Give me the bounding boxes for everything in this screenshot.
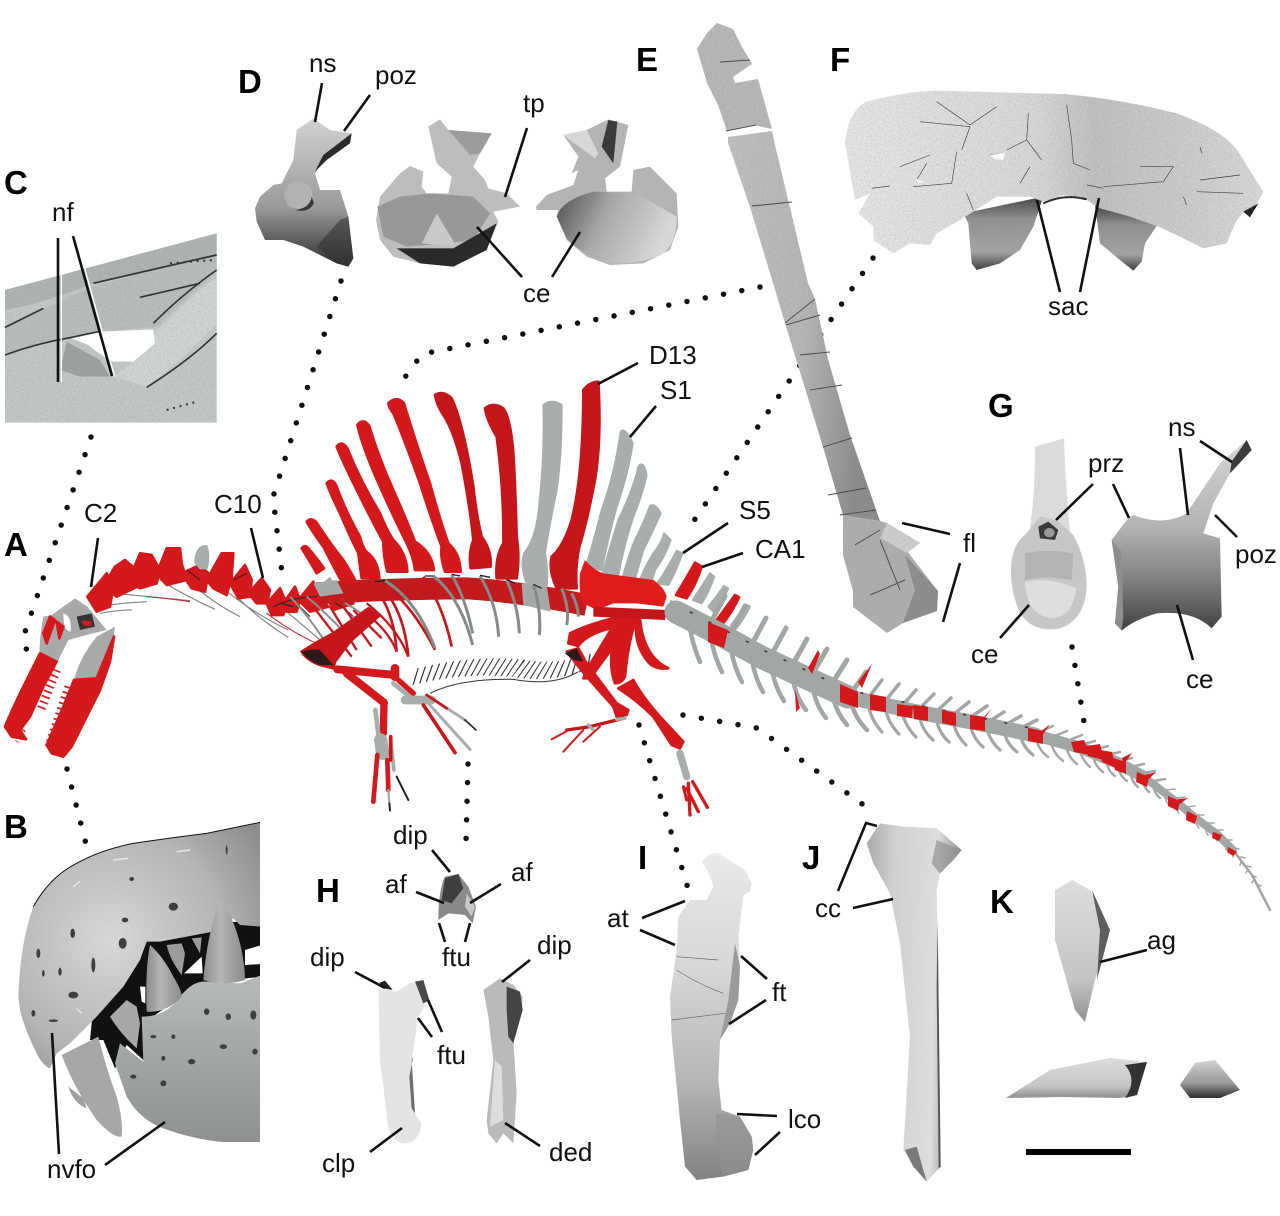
panel H bbox=[378, 874, 523, 1143]
label at: at bbox=[607, 903, 629, 933]
panel A: skeleton bbox=[5, 382, 1270, 910]
dotted connector: panel F to sacrum bbox=[691, 258, 873, 525]
label nvfo bbox=[47, 1033, 165, 1184]
phalanx lateral bbox=[483, 978, 523, 1143]
gray neural spine D12 bbox=[522, 402, 562, 587]
cervical vertebrae bbox=[87, 548, 353, 615]
panel letter H: H bbox=[316, 872, 340, 909]
dotted connector: panel J to hind limb bbox=[683, 715, 865, 806]
label dip: dip bbox=[393, 820, 428, 850]
panel letter K: K bbox=[990, 883, 1014, 920]
panel G bbox=[1011, 438, 1252, 631]
upper snout bbox=[18, 822, 262, 1068]
pelvis and hind limb bbox=[567, 617, 683, 748]
label dip bbox=[393, 820, 450, 872]
label ftu: ftu bbox=[437, 1040, 466, 1070]
neural spine gray bbox=[195, 546, 208, 568]
label CA1 bbox=[702, 534, 806, 567]
label tp: tp bbox=[523, 88, 545, 118]
label ce bbox=[477, 227, 580, 308]
panel letter A: A bbox=[4, 526, 28, 563]
label fl bbox=[902, 523, 976, 622]
ribs bbox=[368, 577, 452, 657]
lower teeth bbox=[203, 910, 245, 983]
label S5: S5 bbox=[739, 495, 771, 525]
claw end bbox=[1180, 1060, 1240, 1098]
panel letter E: E bbox=[636, 41, 658, 78]
red caudal spines bbox=[676, 563, 739, 625]
panel J bbox=[867, 823, 962, 1182]
label ftu bbox=[418, 1000, 466, 1070]
label nf bbox=[52, 197, 112, 382]
panel letter I: I bbox=[638, 839, 647, 876]
dotted connector: panel B to snout bbox=[67, 769, 86, 844]
dark jaw gap bbox=[90, 920, 262, 1068]
label ce bbox=[1177, 605, 1213, 694]
label ce bbox=[971, 605, 1029, 669]
neural spine base bbox=[843, 515, 938, 633]
label fl: fl bbox=[963, 528, 976, 558]
vertebra anterior concave bbox=[536, 119, 678, 265]
label poz: poz bbox=[1235, 539, 1277, 569]
label cc: cc bbox=[815, 893, 841, 923]
scale bar bbox=[1026, 1149, 1131, 1155]
label CA1: CA1 bbox=[755, 534, 806, 564]
panel F bbox=[845, 91, 1263, 271]
gray sacral spines bbox=[586, 431, 750, 630]
label S5 bbox=[683, 495, 771, 553]
claw lateral bbox=[1006, 1058, 1147, 1098]
claw dorsal bbox=[1055, 880, 1110, 1022]
neural spine upper piece bbox=[697, 23, 772, 131]
panel letter D: D bbox=[238, 63, 262, 100]
panel letter F: F bbox=[830, 41, 850, 78]
tail bbox=[676, 596, 1270, 910]
panel E bbox=[697, 23, 938, 633]
label C2: C2 bbox=[84, 498, 117, 528]
label poz bbox=[1215, 515, 1277, 569]
label C10 bbox=[214, 489, 263, 578]
label ded: ded bbox=[549, 1137, 592, 1167]
label poz bbox=[344, 60, 417, 131]
phalanx medial bbox=[378, 980, 428, 1143]
upper teeth bbox=[68, 1087, 87, 1108]
label dip bbox=[310, 942, 385, 988]
label ce: ce bbox=[523, 278, 550, 308]
vertebra posterior rough bbox=[376, 119, 520, 267]
label C2 bbox=[84, 498, 117, 587]
label poz: poz bbox=[375, 60, 417, 90]
label nvfo: nvfo bbox=[47, 1154, 96, 1184]
forelimb bbox=[337, 668, 476, 811]
label ns bbox=[309, 48, 336, 122]
pectoral ribs bbox=[313, 603, 408, 657]
label dip bbox=[502, 930, 572, 982]
panel I bbox=[670, 853, 753, 1180]
label tp bbox=[505, 88, 545, 197]
label ft bbox=[729, 956, 787, 1024]
label D13 bbox=[598, 340, 697, 384]
tail red elements bbox=[708, 622, 1237, 856]
panel letter J: J bbox=[802, 839, 820, 876]
label at bbox=[607, 901, 685, 945]
panel K bbox=[1006, 880, 1240, 1098]
tail centra bbox=[676, 612, 1270, 910]
label clp: clp bbox=[322, 1148, 355, 1178]
label ns: ns bbox=[1168, 412, 1195, 442]
label ce: ce bbox=[971, 639, 998, 669]
panel letter B: B bbox=[4, 808, 28, 845]
label ns: ns bbox=[309, 48, 336, 78]
gastralia bbox=[415, 660, 593, 677]
label ded bbox=[505, 1123, 592, 1167]
red neural spines bbox=[302, 399, 461, 582]
label S1: S1 bbox=[660, 375, 692, 405]
label ag: ag bbox=[1147, 925, 1176, 955]
vertebra lateral bbox=[1112, 440, 1252, 631]
label lco: lco bbox=[788, 1104, 821, 1134]
panel letter G: G bbox=[988, 387, 1014, 424]
foramen and surface lines bbox=[5, 237, 217, 410]
hind feet bbox=[552, 718, 707, 815]
nerve foramina bbox=[31, 845, 258, 1086]
panel B bbox=[18, 822, 262, 1143]
skull lower jaw bbox=[47, 627, 115, 757]
label D13: D13 bbox=[649, 340, 697, 370]
label nf: nf bbox=[52, 197, 74, 227]
vertebra lateral bbox=[255, 118, 353, 267]
label dip: dip bbox=[537, 930, 572, 960]
skull upper bbox=[5, 598, 107, 742]
back teeth bbox=[167, 937, 202, 975]
neural spine shaft bbox=[728, 131, 880, 521]
tail neural spines bbox=[711, 596, 866, 692]
bone bbox=[867, 823, 962, 1182]
fracture lines bbox=[872, 102, 1243, 210]
dotted connector: panel H to forelimb bbox=[466, 764, 468, 842]
label C10: C10 bbox=[214, 489, 262, 519]
label clp bbox=[322, 1128, 402, 1178]
bone surface bbox=[5, 233, 217, 423]
vertebra anterior bbox=[1011, 438, 1087, 629]
label ft: ft bbox=[772, 977, 787, 1007]
neck ribs bbox=[100, 580, 325, 644]
label af bbox=[470, 857, 533, 903]
label prz bbox=[1056, 448, 1129, 520]
neck and skull bbox=[5, 546, 408, 757]
dotted connector: panel G to tail bbox=[1072, 647, 1084, 722]
dotted connector: panel C to skull bbox=[24, 437, 91, 653]
label ftu: ftu bbox=[442, 942, 471, 972]
sacrum bbox=[580, 560, 667, 610]
label ag bbox=[1100, 925, 1176, 962]
label ns bbox=[1168, 412, 1232, 515]
label S1 bbox=[630, 375, 692, 437]
label af: af bbox=[385, 869, 407, 899]
label ce: ce bbox=[1186, 664, 1213, 694]
scapula bbox=[302, 608, 380, 668]
dotted connector: panel I to hind limb bbox=[639, 725, 690, 895]
trunk bbox=[302, 382, 750, 815]
label cc bbox=[815, 823, 893, 923]
pegs bbox=[963, 197, 1043, 270]
end view bbox=[438, 874, 476, 923]
bone bbox=[670, 853, 753, 1180]
panel C bbox=[5, 233, 217, 423]
label sac: sac bbox=[1048, 291, 1088, 321]
dorsal centra bbox=[317, 588, 587, 605]
label prz: prz bbox=[1088, 448, 1124, 478]
panel letter C: C bbox=[4, 164, 28, 201]
panel D bbox=[255, 118, 678, 267]
label af bbox=[385, 869, 444, 903]
label ftu bbox=[439, 923, 471, 972]
label dip: dip bbox=[310, 942, 345, 972]
label lco bbox=[737, 1104, 821, 1155]
dotted connector: panel E to dorsal spine bbox=[400, 287, 760, 384]
label sac bbox=[1037, 198, 1099, 321]
lower jaw bbox=[115, 975, 262, 1143]
ilium blade bbox=[845, 91, 1263, 253]
label af: af bbox=[511, 857, 533, 887]
dotted connector: panel D to neck bbox=[273, 281, 341, 573]
tail chevrons bbox=[690, 628, 867, 730]
